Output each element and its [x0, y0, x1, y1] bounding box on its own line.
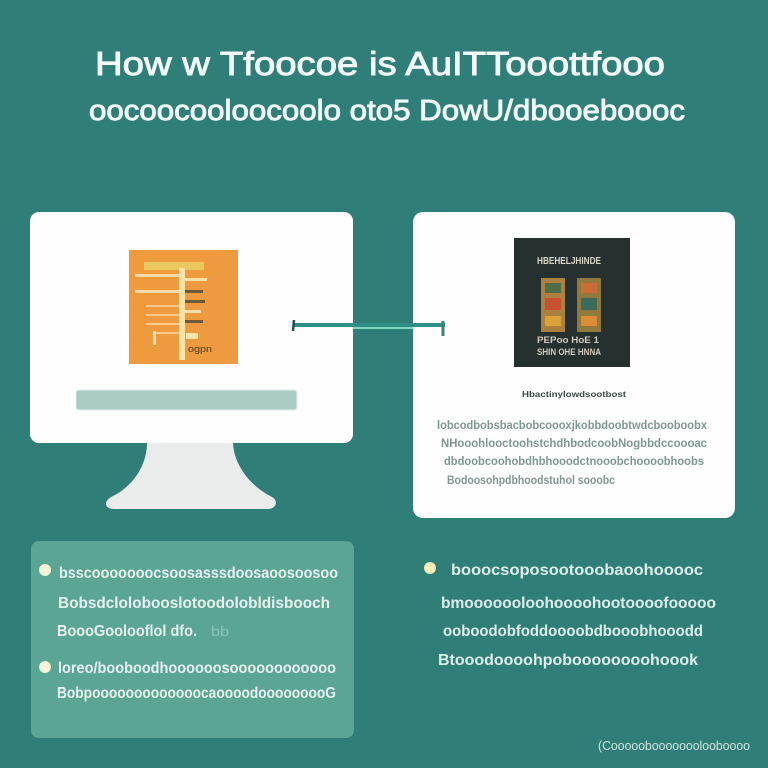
bullet text one: BoooGoolooflol dfo. [57, 623, 197, 640]
right text block: ooboodobfoddoooobdbooobhooodd [443, 623, 703, 640]
monitor stand [106, 443, 276, 509]
orange book cover [129, 250, 238, 364]
right text block: Btooodoooohpoboooooooohoook [438, 652, 698, 669]
book description: dbdoobcoohobdhbhooodctnooobchoooobhoobs [444, 456, 704, 468]
arrow connector [293, 320, 445, 336]
bullet text one [57, 565, 338, 640]
title: oocoocooloocoolo oto5 DowU/dbooeboooc [89, 95, 685, 127]
bullet [39, 661, 51, 673]
right bullet list [424, 562, 716, 669]
panel: book detail [413, 212, 735, 518]
dark book cover: PEPoo HoE 1 [537, 335, 599, 345]
bullet text one: bsscooooooocsoosasssdoosaoosoosoo [59, 565, 338, 582]
panel: monitor [30, 212, 353, 509]
right text block: booocsoposootooobaoohooooc [451, 562, 703, 579]
bullet text one: bb [211, 623, 229, 639]
bullet text one: Bobsdclolobooslotoodolobldisbooch [58, 595, 330, 612]
orange book cover: ogpn [188, 344, 212, 354]
footer source text: (Cooooobooooooolooboooo [598, 739, 750, 753]
book description: Bodoosohpdbhoodstuhol sooobc [447, 475, 616, 487]
monitor screen [30, 212, 353, 443]
book description [437, 420, 708, 487]
search bar [76, 390, 297, 410]
bullet text two: loreo/booboodhoooooosoooooooooooo [58, 660, 336, 677]
right text block [438, 562, 716, 669]
book description: lobcodbobsbacbobcoooxjkobbdoobtwdcbooboobx [437, 420, 708, 432]
book description: NHooohlooctoohstchdhbodcoobNogbbdccoooac [441, 438, 708, 450]
dark book cover: SHIN OHE HNNA [537, 347, 601, 357]
dark book cover: HBEHELJHINDE [537, 256, 601, 267]
bullet text two [57, 660, 336, 702]
book title caption: Hbactinylowdsootbost [522, 390, 626, 399]
title: How w Tfoocoe is AuITTooottfooo [95, 45, 665, 82]
bullet [39, 564, 51, 576]
panel: green info [31, 541, 354, 738]
title [89, 45, 685, 127]
dark book cover [514, 238, 630, 367]
right text block: bmooooooloohoooohootoooofooooo [441, 595, 716, 612]
bullet text two: BobpooooooooooooocaoooodooooooooG [57, 685, 336, 702]
bullet [424, 562, 436, 574]
